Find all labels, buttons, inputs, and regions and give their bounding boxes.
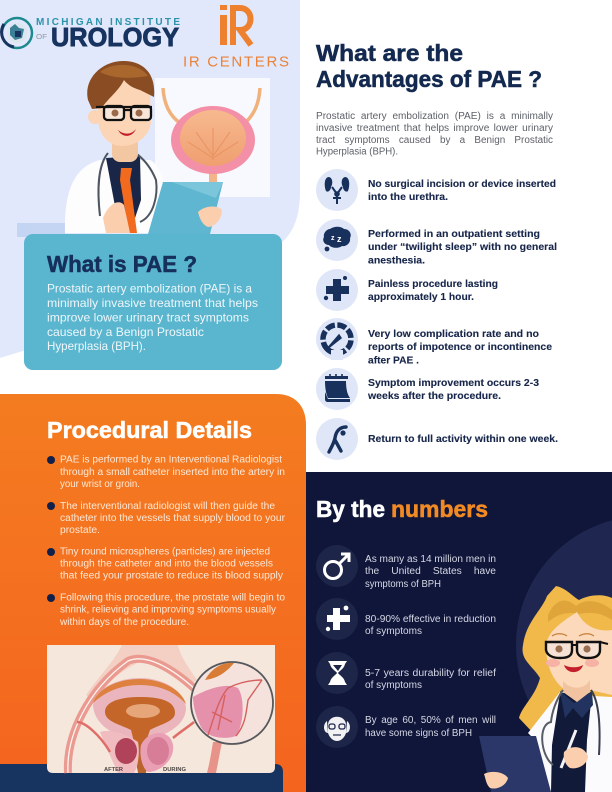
- labels: after and during: DURING: [163, 767, 186, 773]
- icon: old man: [316, 706, 358, 748]
- advantage: twilight sleep: [316, 219, 557, 266]
- heading: procedural details: Procedural Details: [47, 417, 252, 443]
- heading: what is PAE: What is PAE ?: [47, 251, 197, 277]
- stat: 14 million men: As many as 14 million men in: [365, 554, 496, 565]
- text: PAE definition: improve lower urinary tract symptoms: [47, 310, 249, 324]
- heading: advantages of PAE: Advantages of PAE ?: [316, 66, 542, 92]
- step 2: The interventional radiologist will then guide the: [60, 501, 275, 512]
- step 1: your wrist or groin.: [60, 479, 140, 490]
- stat: age 60: have some signs of BPH: [365, 728, 472, 739]
- heading: by the numbers: By the: [316, 496, 385, 522]
- step 3: Tiny round microspheres (particles) are injected: [60, 547, 270, 558]
- advantage: painless: [316, 269, 498, 311]
- advantage: low complication rate: reports of impotence or incontinence: [368, 341, 552, 353]
- stat: 14 million men: symptoms of BPH: [365, 579, 441, 590]
- advantage: return to activity: [316, 418, 558, 460]
- step 3: that feed your prostate to reduce its blood supply: [60, 571, 283, 582]
- advantage: twilight sleep: under “twilight sleep” with no general: [368, 241, 557, 253]
- advantage: no incision: [316, 169, 556, 211]
- step 4: within days of the procedure.: [59, 617, 189, 628]
- advantage: painless: Painless procedure lasting: [368, 278, 498, 290]
- advantage: no incision: into the urethra.: [368, 191, 448, 203]
- heading: by the numbers: numbers: [391, 496, 488, 522]
- advantage: symptom improvement: [316, 368, 539, 410]
- text: advantages introduction: [316, 111, 553, 158]
- logo: Michigan Institute of Urology: MICHIGAN INSTITUTE: [36, 17, 180, 28]
- icon: kidneys: [316, 169, 358, 211]
- advantage: painless: approximately 1 hour.: [368, 291, 474, 303]
- icon: stretching figure: [316, 418, 358, 460]
- step 2: prostate.: [60, 525, 100, 536]
- illustration: prostate anatomy: [47, 645, 275, 773]
- step 2: [47, 501, 286, 536]
- text: advantages introduction: Prostatic artery embolization (PAE) is a minimally: [316, 111, 553, 122]
- step 2: catheter into the vessels that supply blood to your: [60, 513, 286, 524]
- stat: 14 million men: the United States have: [365, 566, 496, 577]
- logo: Michigan Institute of Urology: OF: [36, 34, 47, 41]
- illustration: male doctor: [17, 61, 223, 237]
- text: advantages introduction: Hyperplasia (BPH).: [316, 146, 398, 158]
- heading: advantages of PAE: [316, 40, 542, 92]
- stat: 80-90% effective: [316, 598, 496, 640]
- icon: white plus: [316, 598, 358, 640]
- list: procedural steps: [47, 455, 286, 628]
- logo: IR Centers: IR CENTERS: [183, 54, 289, 70]
- icon: hourglass: [316, 652, 358, 694]
- decorative circle behind doctor: [516, 516, 612, 774]
- illustration: anatomical board with bladder: [155, 78, 270, 197]
- icon: male symbol: [316, 545, 358, 587]
- logo: Michigan Institute of Urology: [2, 17, 180, 52]
- panel: by the numbers background: [306, 472, 612, 792]
- text: PAE definition: minimally invasive treatment that helps: [47, 296, 258, 310]
- advantage: twilight sleep: anesthesia.: [368, 254, 425, 266]
- stat: 80-90% effective: of symptoms: [365, 626, 422, 637]
- icon: sleep thought cloud: z: [331, 235, 335, 242]
- step 3: through the catheter and into the blood vessels: [60, 559, 273, 570]
- labels: after and during: AFTER: [104, 767, 123, 773]
- stat: 5-7 years durability: 5-7 years durability for relief: [365, 668, 496, 679]
- text: advantages introduction: tract symptoms caused by a Benign Prostatic: [316, 135, 553, 146]
- step 4: [47, 593, 285, 628]
- stat: age 60: [316, 706, 496, 748]
- advantage: low complication rate: [316, 318, 552, 366]
- stat: 5-7 years durability: [316, 652, 496, 694]
- icon: sleep thought cloud: z: [337, 234, 342, 244]
- advantage: low complication rate: after PAE .: [368, 354, 419, 366]
- panel: procedural details background: [0, 394, 306, 792]
- stat: age 60: By age 60, 50% of men will: [365, 715, 496, 726]
- heading: advantages of PAE: What are the: [316, 40, 463, 66]
- advantage: no incision: No surgical incision or device inserted: [368, 178, 556, 190]
- text: advantages introduction: invasive treatment that helps improve lower urinary: [316, 123, 553, 134]
- advantage: symptom improvement: weeks after the procedure.: [367, 390, 501, 402]
- stat: 80-90% effective: 80-90% effective in reduction: [365, 614, 496, 625]
- logo: IR Centers: [183, 5, 289, 70]
- advantage: twilight sleep: Performed in an outpatient setting: [368, 228, 540, 240]
- stat: 5-7 years durability: of symptoms: [365, 680, 422, 691]
- labels: after and during: [104, 767, 186, 773]
- stat: 14 million men: [316, 545, 496, 590]
- advantage: symptom improvement: Symptom improvement occurs 2-3: [368, 377, 539, 389]
- step 3: [47, 547, 283, 582]
- logo: Michigan Institute of Urology: UROLOGY: [51, 22, 179, 52]
- illustration: female doctor: [479, 586, 612, 792]
- advantage: low complication rate: Very low complication rate and no: [368, 328, 539, 340]
- text: PAE definition: caused by a Benign Prostatic: [47, 325, 204, 339]
- step 4: Following this procedure, the prostate will begin to: [60, 593, 285, 604]
- panel: what is PAE: [24, 234, 282, 370]
- step 1: PAE is performed by an Interventional Radiologist: [60, 455, 282, 466]
- icon: plus with sparkles: [316, 269, 358, 311]
- step 1: through a small catheter inserted into the artery in: [60, 467, 285, 478]
- text: PAE definition: Prostatic artery embolization (PAE) is a: [47, 282, 252, 296]
- icon: sleep thought cloud: [316, 219, 358, 261]
- step 1: [47, 455, 285, 490]
- footer bar: [0, 764, 283, 792]
- advantage: return to activity: Return to full activity within one week.: [368, 433, 558, 445]
- step 4: shrink, relieving and improving symptoms usually: [60, 605, 276, 616]
- text: PAE definition: Hyperplasia (BPH).: [47, 339, 146, 353]
- text: PAE definition: [47, 282, 258, 353]
- panel: light blue header background: [0, 0, 300, 358]
- icon: gauge: [316, 318, 358, 360]
- heading: by the numbers: [316, 496, 488, 522]
- icon: calendar: [316, 368, 358, 410]
